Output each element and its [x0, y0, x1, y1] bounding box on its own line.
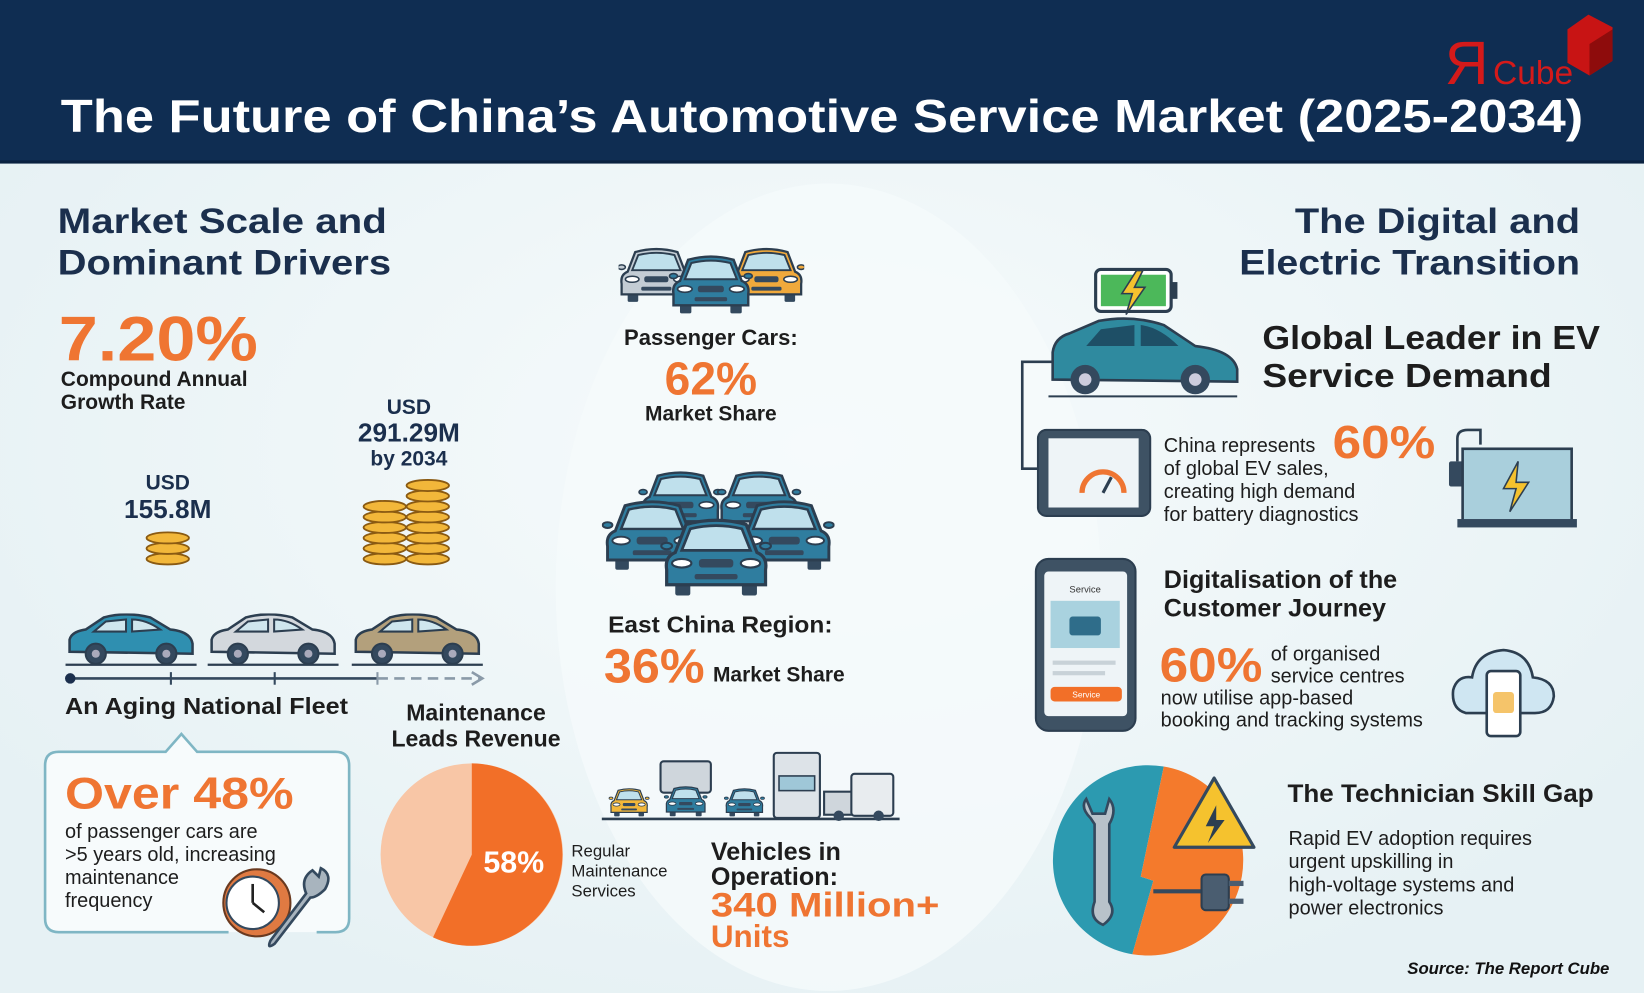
left heading [58, 201, 391, 283]
right heading [1239, 201, 1580, 283]
callout: over 48% [45, 734, 349, 946]
pie chart [381, 763, 563, 946]
CAGR stat: 7.20% [59, 305, 258, 375]
stat: vehicles in operation: 340 Million+ [711, 886, 939, 924]
aging fleet cars + timeline [65, 614, 483, 685]
icon: passenger cars [618, 249, 805, 313]
heading: global leader [1262, 320, 1601, 395]
icon: coins tall [364, 480, 449, 564]
callout: over 48%: of passenger cars are [65, 821, 258, 843]
logo: Cube [1493, 55, 1573, 92]
stat: east china: Market Share [713, 664, 845, 687]
callout: over 48%: maintenance [65, 867, 179, 889]
heading: digitalisation [1164, 566, 1397, 623]
pie chart: 58% [483, 845, 544, 879]
CAGR stat: Growth Rate [61, 391, 185, 414]
heading: maintenance leads revenue: Leads Revenue [391, 726, 561, 752]
2034 value: USD [387, 396, 431, 419]
pie label [571, 842, 667, 901]
right heading: The Digital and [1295, 201, 1580, 241]
text: ev sales 60%: creating high demand [1164, 481, 1355, 503]
left heading: Dominant Drivers [58, 243, 391, 283]
title: The Future of China’s Automotive Service Market (2025-2034) [61, 90, 1583, 142]
pie label: Maintenance [571, 862, 667, 881]
text: ev sales 60%: of global EV sales, [1164, 458, 1329, 480]
2034 value [358, 396, 460, 471]
icon: diagnostic tablet [1038, 430, 1150, 516]
text: app-based 60%: booking and tracking systems [1161, 710, 1423, 732]
stat: passenger cars [624, 325, 798, 425]
icon: car cluster [603, 473, 834, 595]
text: app-based 60%: of organised [1271, 644, 1380, 666]
2025 value [124, 472, 211, 524]
CAGR stat: Compound Annual [61, 368, 248, 391]
text: ev sales 60% [1164, 416, 1435, 526]
stat: passenger cars: 62% [665, 352, 757, 404]
callout: over 48%: frequency [65, 890, 152, 912]
heading: global leader: Global Leader in EV [1262, 320, 1601, 357]
text: app-based 60%: now utilise app-based [1161, 688, 1353, 710]
pie label: Regular [571, 842, 631, 861]
icon: phone app: Service [1069, 583, 1101, 594]
text: ev sales 60%: 60% [1333, 416, 1435, 468]
header band [0, 0, 1644, 164]
icon: clock and wrench [223, 868, 328, 946]
icon: skill gap circle [1053, 765, 1254, 956]
left heading: Market Scale and [58, 201, 387, 241]
stat: passenger cars: Passenger Cars: [624, 325, 798, 350]
2025 value: USD [146, 472, 190, 495]
text: skill gap body [1289, 828, 1532, 919]
text: ev sales 60%: China represents [1164, 435, 1315, 457]
stat: east china: 36% [604, 640, 705, 694]
2034 value: by 2034 [370, 448, 448, 471]
heading: aging fleet: An Aging National Fleet [65, 693, 348, 719]
stat: vehicles in operation [711, 838, 939, 954]
stat: passenger cars: Market Share [645, 402, 777, 425]
heading: skill gap: The Technician Skill Gap [1288, 780, 1594, 808]
right heading: Electric Transition [1239, 243, 1580, 283]
heading: maintenance leads revenue: Maintenance [406, 699, 546, 725]
CAGR stat [59, 305, 258, 414]
stat: vehicles in operation: Operation: [711, 863, 838, 891]
icon: vehicles row [602, 753, 900, 821]
2034 value: 291.29M [358, 417, 460, 447]
text: skill gap body: urgent upskilling in [1289, 851, 1453, 873]
icon: phone app [1036, 559, 1135, 731]
heading: digitalisation: Digitalisation of the [1164, 566, 1397, 594]
text: skill gap body: Rapid EV adoption requires [1289, 828, 1532, 850]
heading: maintenance leads revenue [391, 699, 561, 752]
callout: over 48%: >5 years old, increasing [65, 844, 276, 866]
icon: coins small [147, 532, 189, 564]
text: skill gap body: high-voltage systems and [1289, 874, 1514, 896]
source: Source: The Report Cube [1407, 959, 1609, 978]
heading: global leader: Service Demand [1262, 358, 1552, 395]
logo [1445, 15, 1613, 97]
text: skill gap body: power electronics [1289, 897, 1444, 919]
logo: Я [1445, 29, 1489, 97]
text: app-based 60%: 60% [1160, 639, 1262, 693]
pie label: Services [571, 882, 636, 901]
stat: east china: East China Region: [608, 611, 832, 637]
icon: EV car [1022, 319, 1237, 469]
text: ev sales 60%: for battery diagnostics [1164, 504, 1359, 526]
stat: vehicles in operation: Units [711, 919, 789, 954]
callout: over 48%: Over 48% [65, 769, 294, 818]
heading: digitalisation: Customer Journey [1164, 595, 1386, 623]
icon: battery charge [1096, 269, 1177, 315]
text: app-based 60% [1160, 639, 1423, 732]
icon: cloud phone [1453, 650, 1554, 736]
icon: phone app: Service [1072, 689, 1101, 699]
stat: east china [604, 611, 845, 694]
stat: vehicles in operation: Vehicles in [711, 838, 841, 866]
icon: battery pack [1449, 430, 1577, 527]
text: app-based 60%: service centres [1271, 666, 1405, 688]
2025 value: 155.8M [124, 494, 211, 524]
